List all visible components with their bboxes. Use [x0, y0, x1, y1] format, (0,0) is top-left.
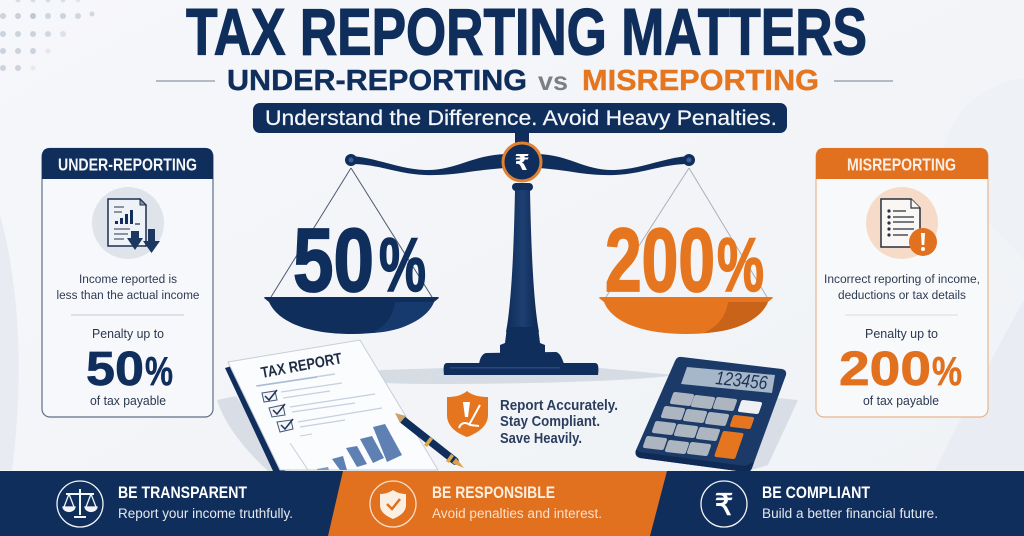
- icon: shield alert: [447, 391, 488, 437]
- penalty value: [839, 343, 962, 396]
- callout: report accurately: [447, 391, 618, 447]
- floor shadow under scale: [378, 368, 674, 384]
- item: be responsible: [370, 481, 602, 527]
- calculator display: 123456: [714, 368, 769, 394]
- item: be responsible: Avoid penalties and interest.: [432, 506, 602, 521]
- illustration: calculator: [636, 357, 798, 472]
- calculator keys: [642, 392, 763, 459]
- icon: pen: [395, 413, 464, 468]
- scale column and base: [444, 130, 598, 375]
- left chains: [271, 168, 432, 297]
- calculator display: [681, 367, 775, 394]
- 200% on right pan: 200: [605, 211, 715, 311]
- icon: report with down arrows: [92, 187, 164, 259]
- penalty label: Penalty up to: [865, 326, 938, 341]
- callout text: Stay Compliant.: [500, 413, 600, 430]
- icon: rupee: [701, 481, 747, 527]
- description: Income reported is: [79, 272, 177, 286]
- icon: shield check: [370, 481, 416, 527]
- 50% on left pan: 50: [293, 211, 374, 311]
- card header: UNDER-REPORTING: [58, 154, 197, 174]
- penalty value: 200: [839, 343, 931, 396]
- description: Incorrect reporting of income,: [824, 272, 980, 286]
- item: be compliant: [701, 481, 938, 527]
- panel: under-reporting: [42, 148, 213, 417]
- penalty note: of tax payable: [863, 393, 939, 408]
- callout text: Save Heavily.: [500, 430, 582, 447]
- subtitle: under-reporting vs misreporting: vs: [538, 66, 568, 96]
- tagline pill: Understand the Difference. Avoid Heavy Penalties.: [265, 106, 777, 130]
- penalty note: of tax payable: [90, 393, 166, 408]
- panel: misreporting: [816, 148, 988, 417]
- item: be transparent: Report your income truthfully.: [118, 506, 293, 521]
- description: [824, 272, 980, 302]
- penalty value: 50: [86, 343, 144, 396]
- item: be transparent: [57, 481, 293, 527]
- item: be compliant: Build a better financial future.: [762, 506, 938, 521]
- balance scale: [264, 130, 773, 375]
- illustration: tax report document: [217, 340, 438, 471]
- item: be compliant: BE COMPLIANT: [762, 483, 871, 502]
- beam: [345, 154, 695, 175]
- icon: rupee: ₹: [714, 488, 734, 523]
- item: be transparent: BE TRANSPARENT: [118, 483, 248, 502]
- penalty label: Penalty up to: [92, 326, 164, 341]
- subtitle: under-reporting vs misreporting: UNDER-REPORTING: [227, 65, 527, 97]
- card header: MISREPORTING: [847, 154, 956, 174]
- rupee hub: ₹: [514, 151, 530, 176]
- orange centre panel: [328, 471, 667, 536]
- right chains: [606, 168, 767, 297]
- document heading: TAX REPORT: [260, 350, 344, 382]
- subtitle: under-reporting vs misreporting: MISREPORTING: [582, 65, 819, 97]
- icon: scales: [57, 481, 103, 527]
- left pan: [264, 297, 439, 334]
- description: deductions or tax details: [838, 288, 966, 302]
- item: be responsible: BE RESPONSIBLE: [432, 483, 555, 502]
- description: [56, 272, 200, 302]
- callout text: Report Accurately.: [500, 397, 618, 414]
- card header: [42, 148, 213, 179]
- penalty value: %: [932, 348, 962, 394]
- 50% on left pan: %: [379, 223, 426, 308]
- subtitle: under-reporting vs misreporting: [156, 65, 893, 97]
- penalty value: %: [145, 348, 173, 394]
- penalty value: [86, 343, 173, 396]
- card header: [816, 148, 988, 179]
- checklist: [262, 383, 382, 432]
- rupee hub: [503, 143, 541, 181]
- icon: document with alert: [866, 187, 938, 259]
- right pan: [599, 297, 773, 334]
- bottom band: [0, 471, 1024, 536]
- 200% on right pan: %: [717, 223, 764, 308]
- description: less than the actual income: [56, 288, 200, 302]
- bar chart: [290, 424, 402, 470]
- callout text: [500, 397, 618, 447]
